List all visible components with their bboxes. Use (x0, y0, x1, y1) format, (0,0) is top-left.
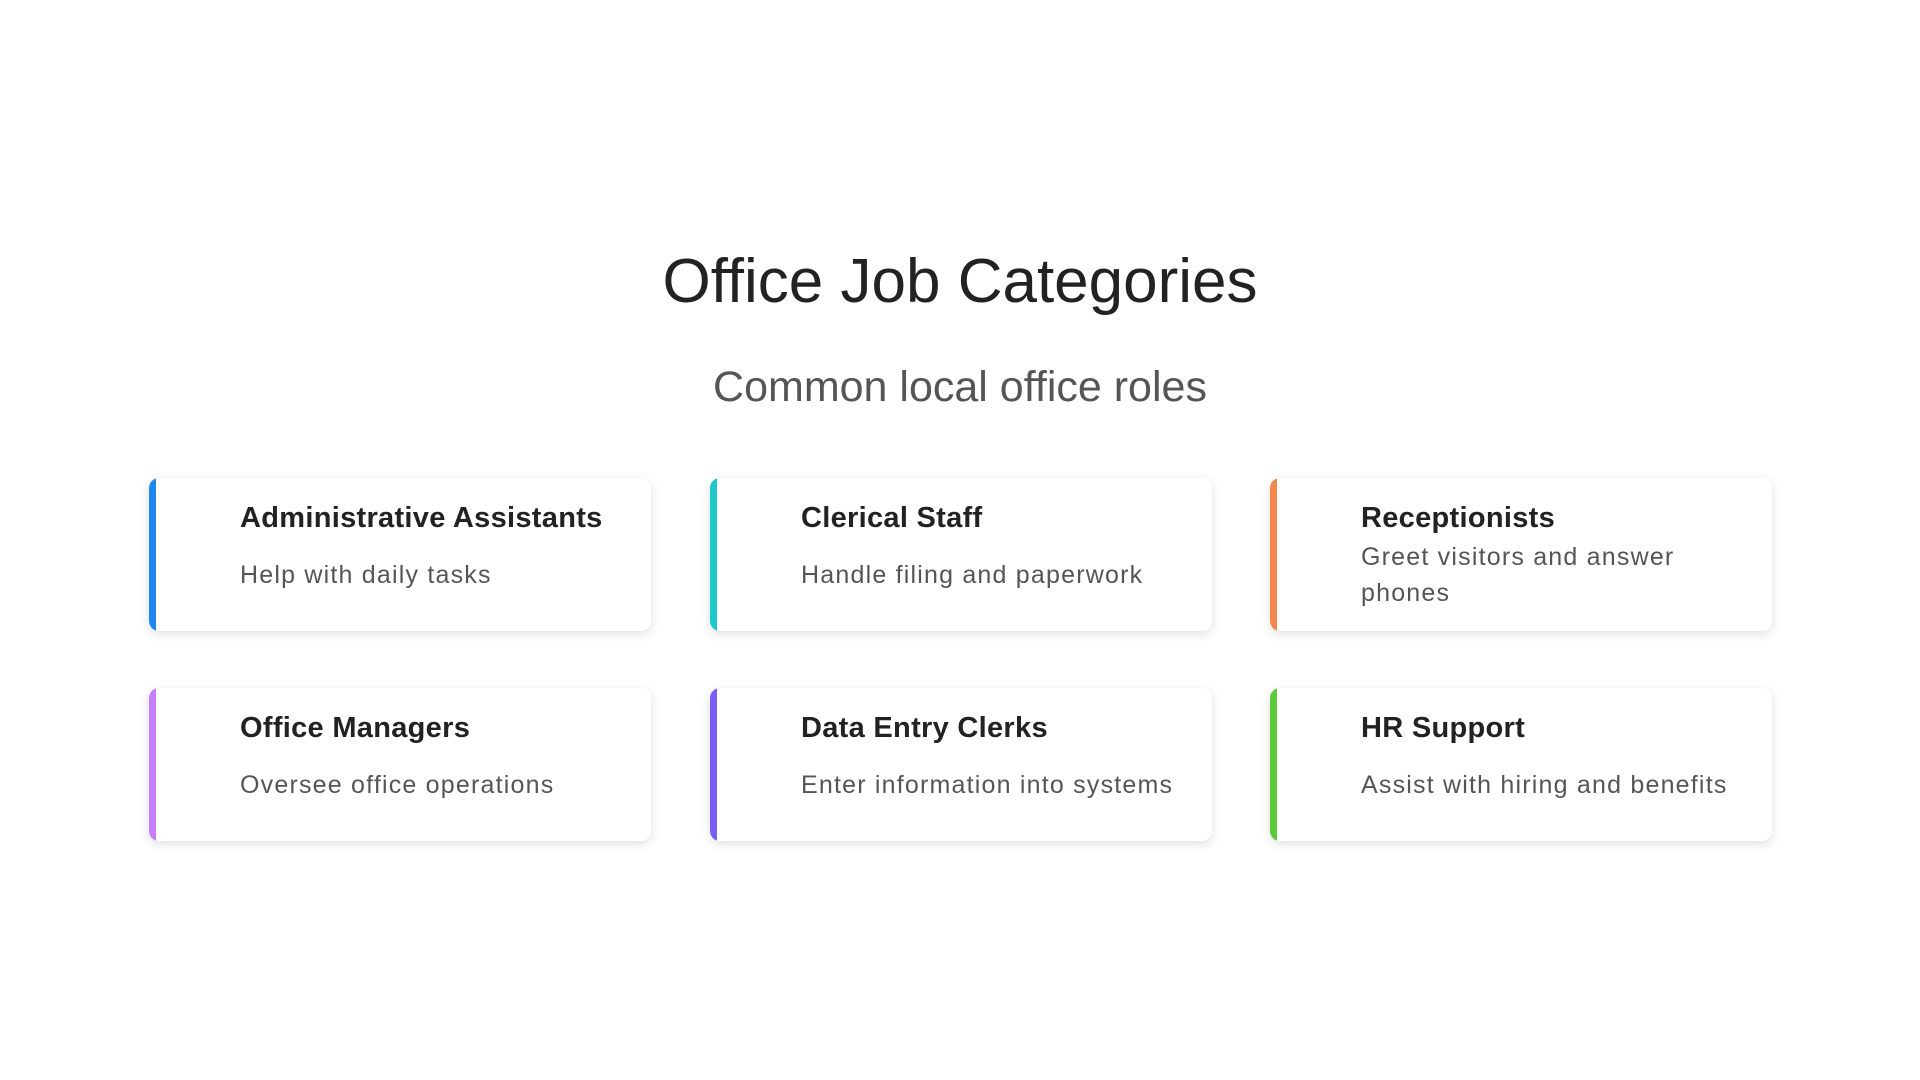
card: administrative assistants: Administrative Assistants (240, 502, 603, 534)
card: hr support: HR Support (1361, 712, 1525, 744)
card: clerical staff: Clerical Staff (801, 502, 982, 534)
card: receptionists: Greet visitors and answer phones (1361, 543, 1674, 607)
card: clerical staff: Handle filing and paperwork (801, 561, 1143, 589)
card: hr support: Assist with hiring and benefits (1361, 771, 1728, 799)
card: administrative assistants (149, 478, 651, 631)
card: data entry clerks: Enter information into systems (801, 771, 1173, 799)
card: hr support (1270, 688, 1772, 841)
card: clerical staff (710, 478, 1212, 631)
card: data entry clerks: Data Entry Clerks (801, 712, 1048, 744)
card: administrative assistants: Help with daily tasks (240, 561, 492, 589)
subtitle: Common local office roles (713, 363, 1207, 411)
card: data entry clerks (710, 688, 1212, 841)
card: receptionists (1270, 478, 1772, 631)
card: office managers: Office Managers (240, 712, 470, 744)
card: office managers: Oversee office operations (240, 771, 554, 799)
card: receptionists: Receptionists (1361, 502, 1555, 534)
card: office managers (149, 688, 651, 841)
title: Office Job Categories (662, 247, 1258, 316)
